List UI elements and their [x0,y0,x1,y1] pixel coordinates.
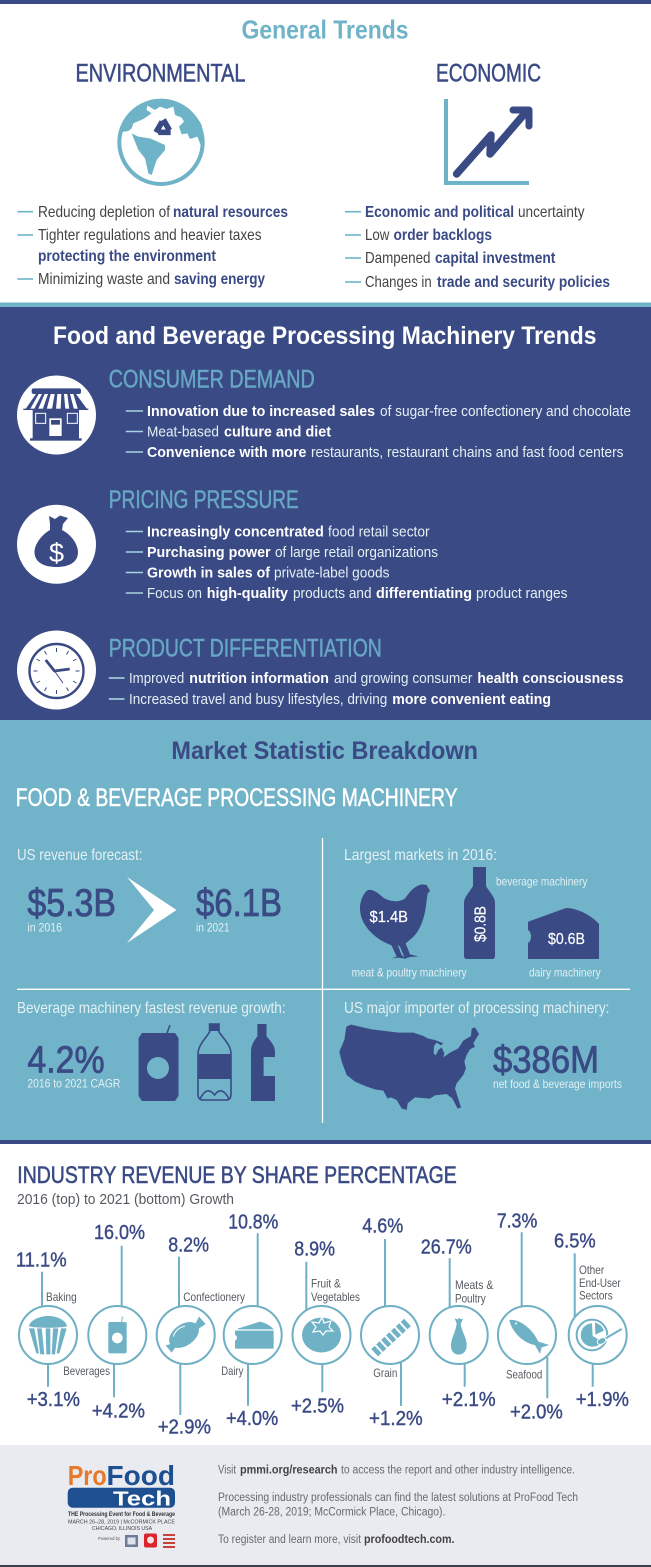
category: Baking [16,1250,80,1411]
category: Other End-User Sectors: Other [579,1263,604,1277]
list: environmental bullets: saving energy [174,271,265,288]
heading: Product Differentiation: PRODUCT DIFFERENTIATION [109,635,382,663]
category: Fruit and Vegetables: Vegetables [311,1290,360,1304]
stat: US revenue forecast [17,847,282,943]
icon: soda can [139,1025,178,1101]
icon: money bag: $ [49,538,64,568]
icon: plastic bottle [198,1024,231,1100]
logo: ProFood Tech: MARCH 26–28, 2019 | McCORMICK PLACE [68,1519,175,1525]
category: Confectionery: 8.2% [168,1235,209,1257]
list: consumer demand bullets: of sugar-free confectionery and chocolate [380,403,631,420]
category: Baking: 11.1% [16,1250,67,1272]
category: Dairy [221,1211,282,1430]
list: product differentiation bullets [109,670,624,708]
stat: beverage machinery growth: 2016 to 2021 CAGR [27,1077,121,1091]
icon: beverage bottle [464,867,495,959]
category: Other End-User Sectors: 6.5% [554,1230,596,1252]
map: United States [339,1025,479,1110]
list: economic bullets: trade and security policies [437,274,610,291]
category: Meats and Poultry: Poultry [455,1291,486,1305]
category: Seafood: +2.0% [510,1401,563,1423]
icon: rising chart arrow [446,99,529,183]
stat: US revenue forecast: in 2016 [27,921,62,935]
list: environmental bullets [17,204,288,288]
category: Baking: Baking [46,1290,77,1304]
category: Beverages: Beverages [63,1364,110,1378]
category: Beverages: 16.0% [94,1222,145,1244]
category: Other End-User Sectors [554,1230,629,1411]
list: consumer demand bullets: Innovation due to increased sales [147,403,375,420]
icon: chicken [360,884,430,959]
icon: clock [17,630,96,710]
list: environmental bullets: Minimizing waste and [38,271,170,288]
category: Baking: +3.1% [27,1389,80,1411]
category: Grain [361,1216,423,1430]
list: economic bullets: Dampened [365,250,430,267]
list: consumer demand bullets [126,403,631,461]
category: Seafood [497,1211,563,1423]
list: product differentiation bullets: Increased travel and busy lifestyles, driving [129,691,387,708]
category: Other End-User Sectors: Sectors [579,1289,613,1303]
list: economic bullets: Changes in [365,274,432,291]
list: pricing pressure bullets: product ranges [476,585,568,602]
icon: storefront [17,376,96,454]
category: Other End-User Sectors: End-User [579,1276,621,1290]
logo: ProFood Tech: THE Processing Event for Food & Beverage [68,1512,176,1518]
category: Meats and Poultry: +2.1% [442,1389,496,1411]
list: environmental bullets: protecting the environment [38,248,217,265]
list: consumer demand bullets: Meat-based [147,424,219,441]
icon: globe with recycling symbol [119,100,203,184]
icon: money bag [17,505,96,584]
text block: footer call to action [218,1464,578,1546]
list: environmental bullets: Reducing depletion of [38,204,170,221]
stat: US imports: US major importer of processing machinery: [344,1000,609,1017]
icon: chicken: $1.4B [370,909,408,926]
list: pricing pressure bullets: products and [293,585,372,602]
list: environmental bullets: natural resources [173,204,288,221]
logo: ProFood Tech: Pro [68,1460,107,1491]
category: Dairy: +4.0% [226,1408,278,1430]
list: product differentiation bullets: more convenient eating [392,691,551,708]
subheading: growth years: 2016 (top) to 2021 (bottom) Growth [17,1191,234,1208]
list: consumer demand bullets: culture and diet [224,424,331,441]
category: Grain: Grain [373,1366,397,1380]
stat: US imports: $386M [493,1040,599,1082]
heading: General Trends: General Trends [242,14,408,44]
text block: footer call to action: to access the report and other industry intelligence. [341,1464,575,1476]
list: product differentiation bullets: and growing consumer [334,670,472,687]
heading: Food & Beverage Processing Machinery: FOOD & BEVERAGE PROCESSING MACHINERY [16,784,458,812]
category: Beverages [63,1222,146,1423]
list: consumer demand bullets: Convenience with more [147,444,306,461]
category: Dairy: Dairy [221,1364,243,1378]
list: economic bullets [345,204,610,291]
category: Grain: 4.6% [362,1216,403,1238]
list: product differentiation bullets: Improved [129,670,184,687]
stat: US revenue forecast: $5.3B [27,882,116,925]
category: Fruit and Vegetables: +2.5% [291,1396,344,1418]
panel: market statistic breakdown [0,720,651,1144]
list: pricing pressure bullets: food retail sector [328,524,430,541]
list: product differentiation bullets: health consciousness [477,670,624,687]
stat: US revenue forecast: in 2021 [196,921,230,935]
category: Fruit and Vegetables [291,1239,360,1418]
stat: largest markets in 2016 [344,847,601,980]
category: Meats and Poultry: Meats & [455,1278,493,1292]
heading: Pricing Pressure: PRICING PRESSURE [109,486,299,514]
stat: US imports: net food & beverage imports [493,1077,622,1091]
list: economic bullets: uncertainty [518,204,584,221]
list: pricing pressure bullets [126,524,568,602]
heading: Consumer Demand: CONSUMER DEMAND [109,366,315,394]
text block: footer call to action: Visit [218,1464,237,1476]
icon: cheese wedge: $0.6B [548,931,585,948]
list: pricing pressure bullets: Focus on [147,585,202,602]
category: Confectionery [157,1235,245,1438]
heading: Industry Revenue by Share Percentage: INDUSTRY REVENUE BY SHARE PERCENTAGE [17,1162,457,1189]
stat: largest markets in 2016: dairy machinery [529,966,601,980]
list: pricing pressure bullets: differentiating [376,585,472,602]
category: Grain: +1.2% [369,1408,423,1430]
list: pricing pressure bullets: Growth in sales of [147,565,271,582]
list: economic bullets: order backlogs [394,227,492,244]
stat: largest markets in 2016: Largest markets in 2016: [344,847,497,864]
stat: beverage machinery growth: 4.2% [27,1040,105,1082]
list: pricing pressure bullets: Purchasing power [147,544,271,561]
stat: largest markets in 2016: meat & poultry machinery [352,966,467,980]
heading: Market Statistic Breakdown: Market Statistic Breakdown [171,737,478,765]
list: economic bullets: Economic and political [365,204,514,221]
category: Seafood: Seafood [506,1367,542,1381]
heading: Food and Beverage Processing Machinery Trends: Food and Beverage Processing Machinery Trends [53,322,596,350]
icon: cheese wedge [528,908,599,959]
logo: ProFood Tech: Powered by [98,1536,121,1541]
list: product differentiation bullets: nutrition information [189,670,329,687]
stat: largest markets in 2016: beverage machinery [496,875,587,889]
category: Confectionery: +2.9% [158,1416,211,1438]
heading: Environmental: ENVIRONMENTAL [76,60,246,88]
panel: industry revenue by share [16,1162,629,1438]
panel: footer [0,1445,651,1567]
category: Dairy: 10.8% [228,1211,278,1233]
list: economic bullets: capital investment [435,250,556,267]
list: environmental bullets: Tighter regulations and heavier taxes [38,227,262,244]
list: economic bullets: Low [365,227,390,244]
category: Fruit and Vegetables: 8.9% [294,1239,335,1261]
list: pricing pressure bullets: of large retail organizations [275,544,438,561]
category: Seafood: 7.3% [497,1211,537,1233]
text block: footer call to action: Processing industry professionals can find the latest solutions at ProFood Tech [218,1492,578,1504]
text block: footer call to action: To register and learn more, visit [218,1534,362,1546]
text block: footer call to action: (March 26-28, 2019; McCormick Place, Chicago). [218,1507,445,1519]
list: consumer demand bullets: restaurants, restaurant chains and fast food centers [311,444,624,461]
stat: beverage machinery growth: Beverage machinery fastest revenue growth: [17,1000,286,1017]
stat: US revenue forecast: US revenue forecast: [17,847,142,864]
icon: glass bottle [251,1024,275,1101]
category: Confectionery: Confectionery [183,1290,245,1304]
icon: beverage bottle: $0.8B [472,906,490,942]
category: Meats and Poultry: 26.7% [421,1236,472,1258]
category: Beverages: +4.2% [92,1401,145,1423]
panel: general trends [17,14,610,291]
list: pricing pressure bullets: high-quality [207,585,289,602]
arrow: forecast chevron [127,877,176,943]
category: Fruit and Vegetables: Fruit & [311,1277,341,1291]
logo: ProFood Tech: Food [106,1460,175,1491]
stat: beverage machinery growth [17,1000,286,1101]
stat: US imports [339,1000,622,1110]
text block: footer call to action: profoodtech.com. [364,1534,454,1546]
logo: ProFood Tech: Tech [113,1488,171,1510]
panel: machinery trends [0,302,651,720]
text block: footer call to action: pmmi.org/research [240,1464,338,1476]
category: Other End-User Sectors: +1.9% [576,1389,629,1411]
list: pricing pressure bullets: private-label goods [274,565,389,582]
stat: US revenue forecast: $6.1B [196,882,282,925]
logo: ProFood Tech [68,1460,176,1548]
category: Meats and Poultry [421,1236,496,1411]
logo: ProFood Tech: CHICAGO, ILLINOIS USA [92,1526,152,1532]
list: pricing pressure bullets: Increasingly concentrated [147,524,324,541]
heading: Economic: ECONOMIC [436,60,541,88]
